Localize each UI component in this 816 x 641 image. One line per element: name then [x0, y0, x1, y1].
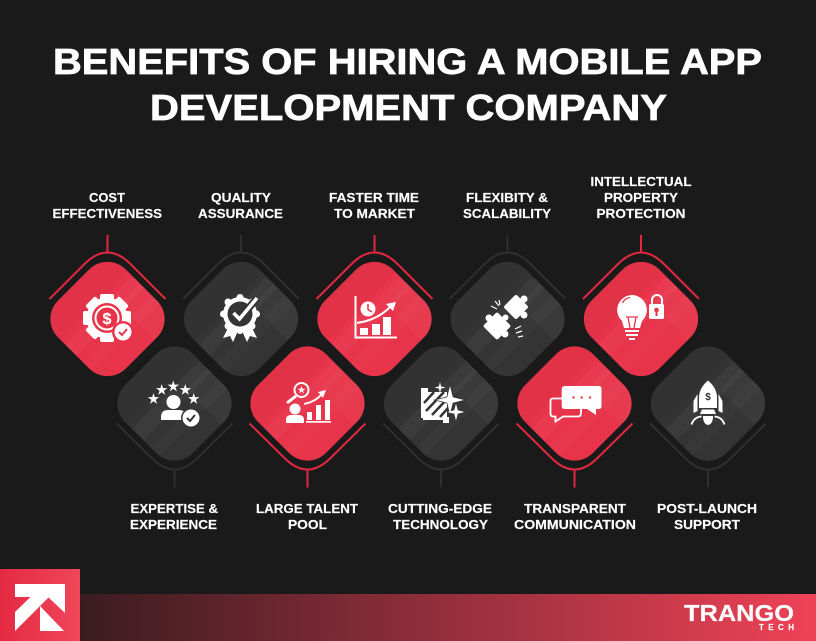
- label: intellectual property protection: INTELLECTUAL: [590, 174, 692, 189]
- label: expertise and experience: EXPERIENCE: [130, 517, 217, 532]
- diamond: [440, 251, 575, 387]
- icon: light bulb and padlock: [617, 295, 664, 339]
- title: DEVELOPMENT COMPANY: [150, 87, 667, 128]
- item: quality assurance: [173, 190, 309, 387]
- title: BENEFITS OF HIRING A MOBILE APP: [53, 41, 762, 82]
- label: quality assurance: ASSURANCE: [198, 206, 283, 221]
- diamond: [373, 336, 509, 471]
- icon: rocket launch: [692, 380, 724, 425]
- connector: [183, 235, 299, 299]
- label: cost effectiveness: [52, 190, 162, 221]
- label: flexibility and scalability: FLEXIBITY &: [466, 190, 548, 205]
- connector: [250, 424, 366, 488]
- label: cost effectiveness: EFFECTIVENESS: [52, 206, 162, 221]
- brand wordmark: TECH: [759, 623, 794, 632]
- label: large talent pool: [256, 501, 358, 532]
- item: post-launch support: [640, 336, 776, 532]
- label: faster time to market: TO MARKET: [334, 206, 415, 221]
- label: large talent pool: LARGE TALENT: [256, 501, 358, 516]
- item: transparent communication: [507, 336, 642, 532]
- diamond: [307, 251, 442, 387]
- brand wordmark: TRANGO: [684, 600, 794, 626]
- label: intellectual property protection: [590, 174, 692, 221]
- label: quality assurance: [198, 190, 283, 221]
- item: flexibility and scalability: [440, 190, 575, 387]
- connector: [583, 235, 699, 299]
- connector: [50, 235, 166, 299]
- diamond: [107, 336, 242, 471]
- label: flexibility and scalability: [463, 190, 551, 221]
- footer bar: [80, 594, 816, 641]
- icon: hatched sheet with sparkles: [421, 382, 467, 423]
- item: cutting-edge technology: [373, 336, 509, 532]
- icon: growth chart with clock: [356, 296, 397, 338]
- label: cutting-edge technology: CUTTING-EDGE: [388, 501, 492, 516]
- label: faster time to market: FASTER TIME: [329, 190, 419, 205]
- icon: quality badge: [220, 294, 260, 342]
- label: cutting-edge technology: TECHNOLOGY: [393, 517, 488, 532]
- connector: [516, 424, 632, 488]
- label: cutting-edge technology: [388, 501, 492, 532]
- item: expertise and experience: [107, 336, 242, 532]
- diamond: [240, 336, 375, 471]
- label: expertise and experience: [130, 501, 218, 532]
- item: intellectual property protection: [573, 174, 709, 387]
- label: quality assurance: QUALITY: [211, 190, 271, 205]
- diamond: [507, 336, 642, 471]
- title: [53, 41, 762, 128]
- diamond: [173, 251, 309, 387]
- label: intellectual property protection: PROTECTION: [596, 206, 686, 221]
- item: faster time to market: [307, 190, 442, 387]
- label: faster time to market: [329, 190, 419, 221]
- item: cost effectiveness: [40, 190, 175, 387]
- label: post-launch support: [657, 501, 757, 532]
- label: intellectual property protection: PROPERTY: [604, 190, 678, 205]
- diamond: [573, 251, 709, 387]
- connector: [316, 235, 432, 299]
- icon: rocket launch: $: [705, 392, 711, 403]
- connector: [383, 424, 499, 488]
- label: transparent communication: COMMUNICATION: [514, 517, 636, 532]
- connector: [116, 424, 232, 488]
- label: expertise and experience: EXPERTISE &: [130, 501, 218, 516]
- icon: chat bubbles: [550, 386, 602, 422]
- icon: gear with dollar: [83, 294, 134, 343]
- label: post-launch support: SUPPORT: [674, 517, 740, 532]
- connector: [650, 424, 766, 488]
- icon: person with rating stars: [148, 380, 201, 428]
- connector: [450, 235, 566, 299]
- diamond: [40, 251, 175, 387]
- label: post-launch support: POST-LAUNCH: [657, 501, 757, 516]
- icon: puzzle pieces: [483, 294, 529, 340]
- icon: talent search and growth: [286, 383, 331, 423]
- label: large talent pool: POOL: [288, 517, 327, 532]
- diamond: [640, 336, 776, 471]
- label: transparent communication: TRANSPARENT: [524, 501, 626, 516]
- label: flexibility and scalability: SCALABILITY: [463, 206, 551, 221]
- label: transparent communication: [514, 501, 636, 532]
- icon: gear with dollar: $: [103, 311, 112, 328]
- logo square: [0, 569, 80, 641]
- item: large talent pool: [240, 336, 375, 532]
- label: cost effectiveness: COST: [89, 190, 125, 205]
